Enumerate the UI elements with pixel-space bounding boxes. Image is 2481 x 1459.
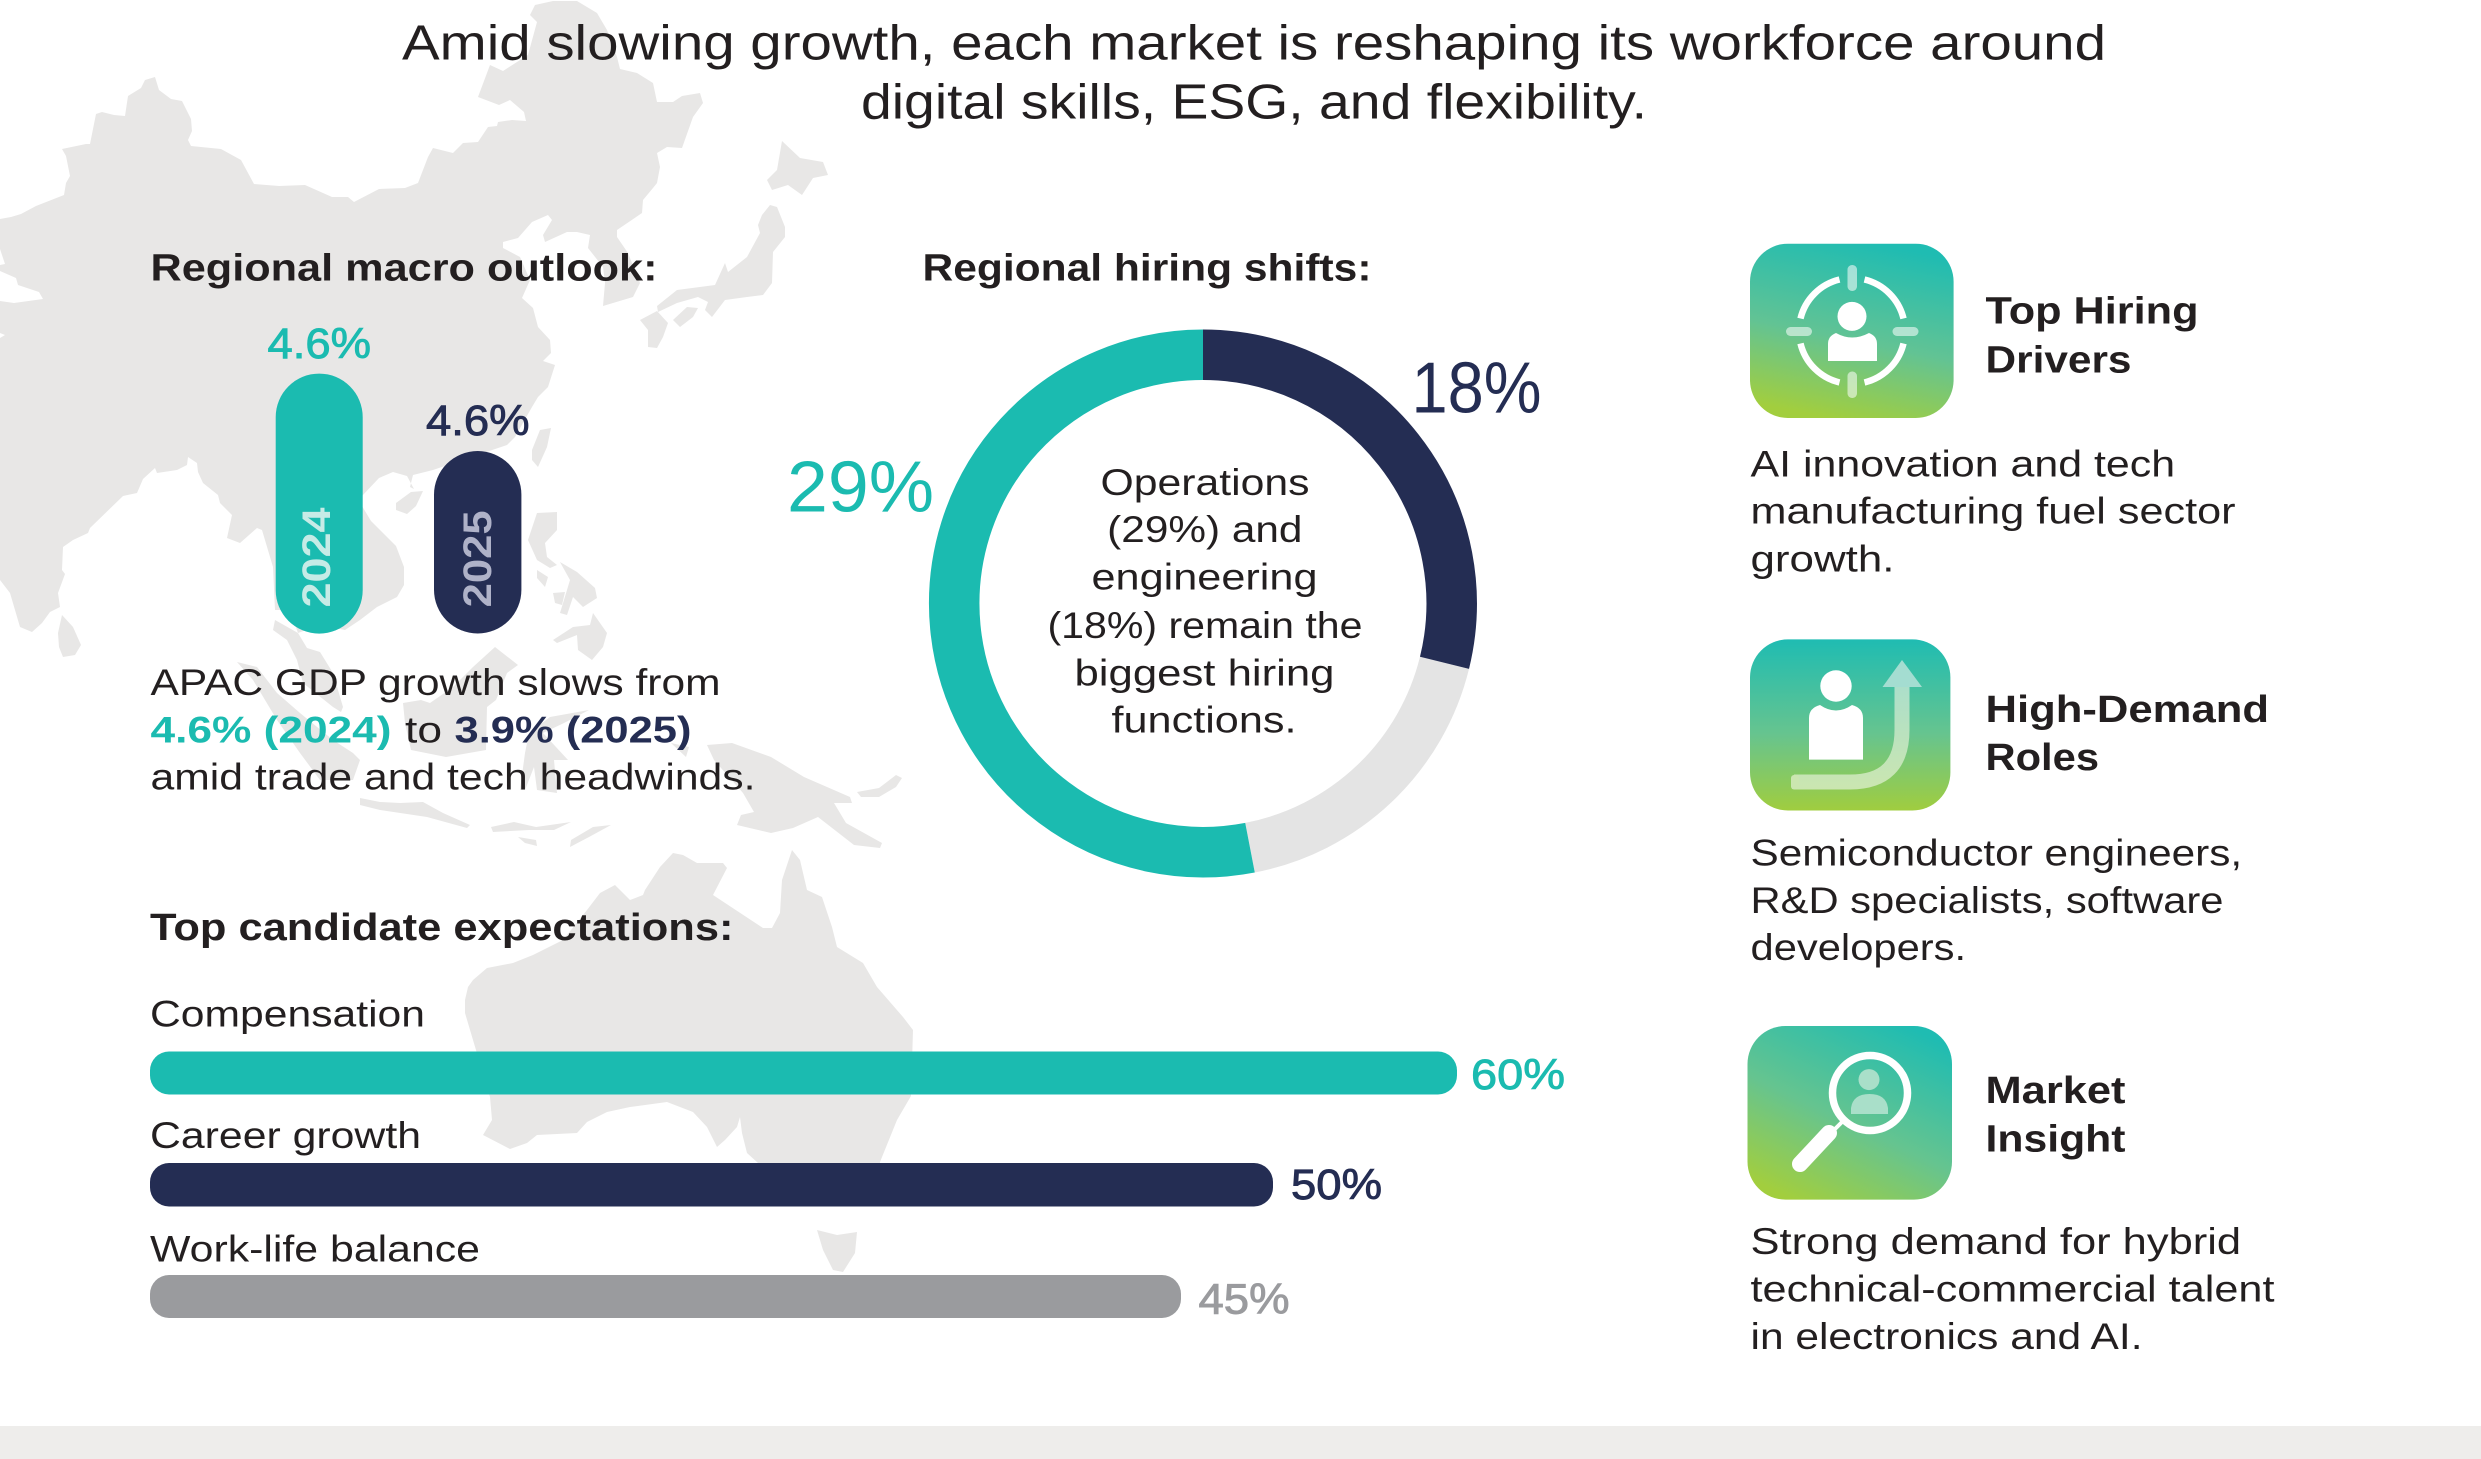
panel: regional hiring shifts (787, 248, 1542, 852)
heading: market insight: Market (1986, 1070, 2126, 1112)
bar row: career growth (150, 1115, 1382, 1209)
description: top hiring drivers (1750, 443, 2236, 579)
heading: top candidate expectations: Top candidate expectations: (150, 907, 734, 949)
bar row: career growth: Career growth (150, 1115, 421, 1156)
donut centre text: (18%) remain the (1048, 605, 1362, 646)
donut centre text: biggest hiring (1074, 652, 1334, 694)
heading: top hiring drivers: Drivers (1986, 339, 2132, 381)
description: high-demand roles (1750, 832, 2242, 968)
heading: high-demand roles: High-Demand (1986, 689, 2269, 731)
icon: target with person (1750, 244, 1954, 418)
panel: top hiring drivers (1750, 244, 2236, 579)
background map of Asia-Pacific (0, 1, 913, 1272)
panel: market insight (1748, 1026, 2275, 1357)
heading: regional macro outlook: Regional macro outlook: (150, 247, 658, 289)
description: market insight (1750, 1221, 2275, 1357)
heading: high-demand roles (1986, 689, 2269, 779)
GDP description: 4.6% (2024) (150, 710, 392, 751)
pill bar 2025 (434, 451, 521, 634)
panel: regional macro outlook (150, 247, 756, 798)
description: market insight: Strong demand for hybrid (1750, 1221, 2241, 1262)
donut centre text: engineering (1092, 556, 1318, 597)
heading: top hiring drivers (1986, 290, 2198, 381)
donut centre text: functions. (1112, 700, 1296, 740)
title: Amid slowing growth, each market is reshaping its workforce around (402, 16, 2106, 70)
label 29%: 29% (787, 448, 934, 528)
bar row: compensation (150, 994, 1565, 1099)
GDP description: APAC GDP growth slows from (150, 662, 720, 703)
heading: regional hiring shifts: Regional hiring shifts: (922, 248, 1372, 290)
label 18%: 18% (1412, 348, 1542, 428)
heading: top hiring drivers: Top Hiring (1986, 290, 2198, 332)
pill bar 2024 (276, 374, 363, 634)
GDP description: to (405, 710, 442, 751)
GDP description: amid trade and tech headwinds. (150, 757, 756, 798)
bar row: work-life balance (150, 1229, 1290, 1324)
description: high-demand roles: developers. (1750, 927, 1966, 968)
value label 2024: 4.6% (268, 320, 371, 368)
GDP description (150, 662, 756, 798)
description: top hiring drivers: AI innovation and tech (1750, 443, 2175, 484)
panel: high-demand roles (1750, 639, 2269, 968)
GDP description: 3.9% (2025) (454, 710, 692, 751)
pill bar 2024: 2024 (295, 507, 339, 608)
description: high-demand roles: R&D specialists, software (1750, 880, 2224, 921)
icon: magnifier over person (1748, 1026, 1952, 1200)
panel: top candidate expectations (150, 907, 1565, 1324)
description: top hiring drivers: growth. (1750, 538, 1894, 579)
description: high-demand roles: Semiconductor engineers, (1750, 832, 2242, 873)
title: digital skills, ESG, and flexibility. (861, 76, 1647, 130)
donut centre text: Operations (1100, 462, 1310, 503)
bar row: work-life balance: Work-life balance (150, 1229, 480, 1270)
description: top hiring drivers: manufacturing fuel sector (1750, 490, 2236, 532)
donut centre text (1048, 462, 1362, 740)
description: market insight: in electronics and AI. (1750, 1316, 2142, 1357)
donut chart (954, 355, 1452, 852)
bar row: compensation: Compensation (150, 994, 425, 1034)
value label 2025: 4.6% (426, 397, 530, 445)
bar row: career growth: 50% (1291, 1161, 1382, 1209)
description: market insight: technical-commercial talent (1750, 1268, 2275, 1309)
heading: high-demand roles: Roles (1986, 737, 2099, 779)
bar row: compensation: 60% (1471, 1051, 1565, 1099)
donut centre text: (29%) and (1107, 509, 1302, 550)
heading: market insight: Insight (1986, 1118, 2126, 1160)
bar row: work-life balance: 45% (1198, 1276, 1290, 1324)
footer band (0, 1426, 2481, 1459)
icon: person with rising arrow (1750, 639, 1950, 810)
pill bar 2025: 2025 (456, 510, 500, 607)
title (402, 16, 2106, 130)
heading: market insight (1986, 1070, 2126, 1160)
